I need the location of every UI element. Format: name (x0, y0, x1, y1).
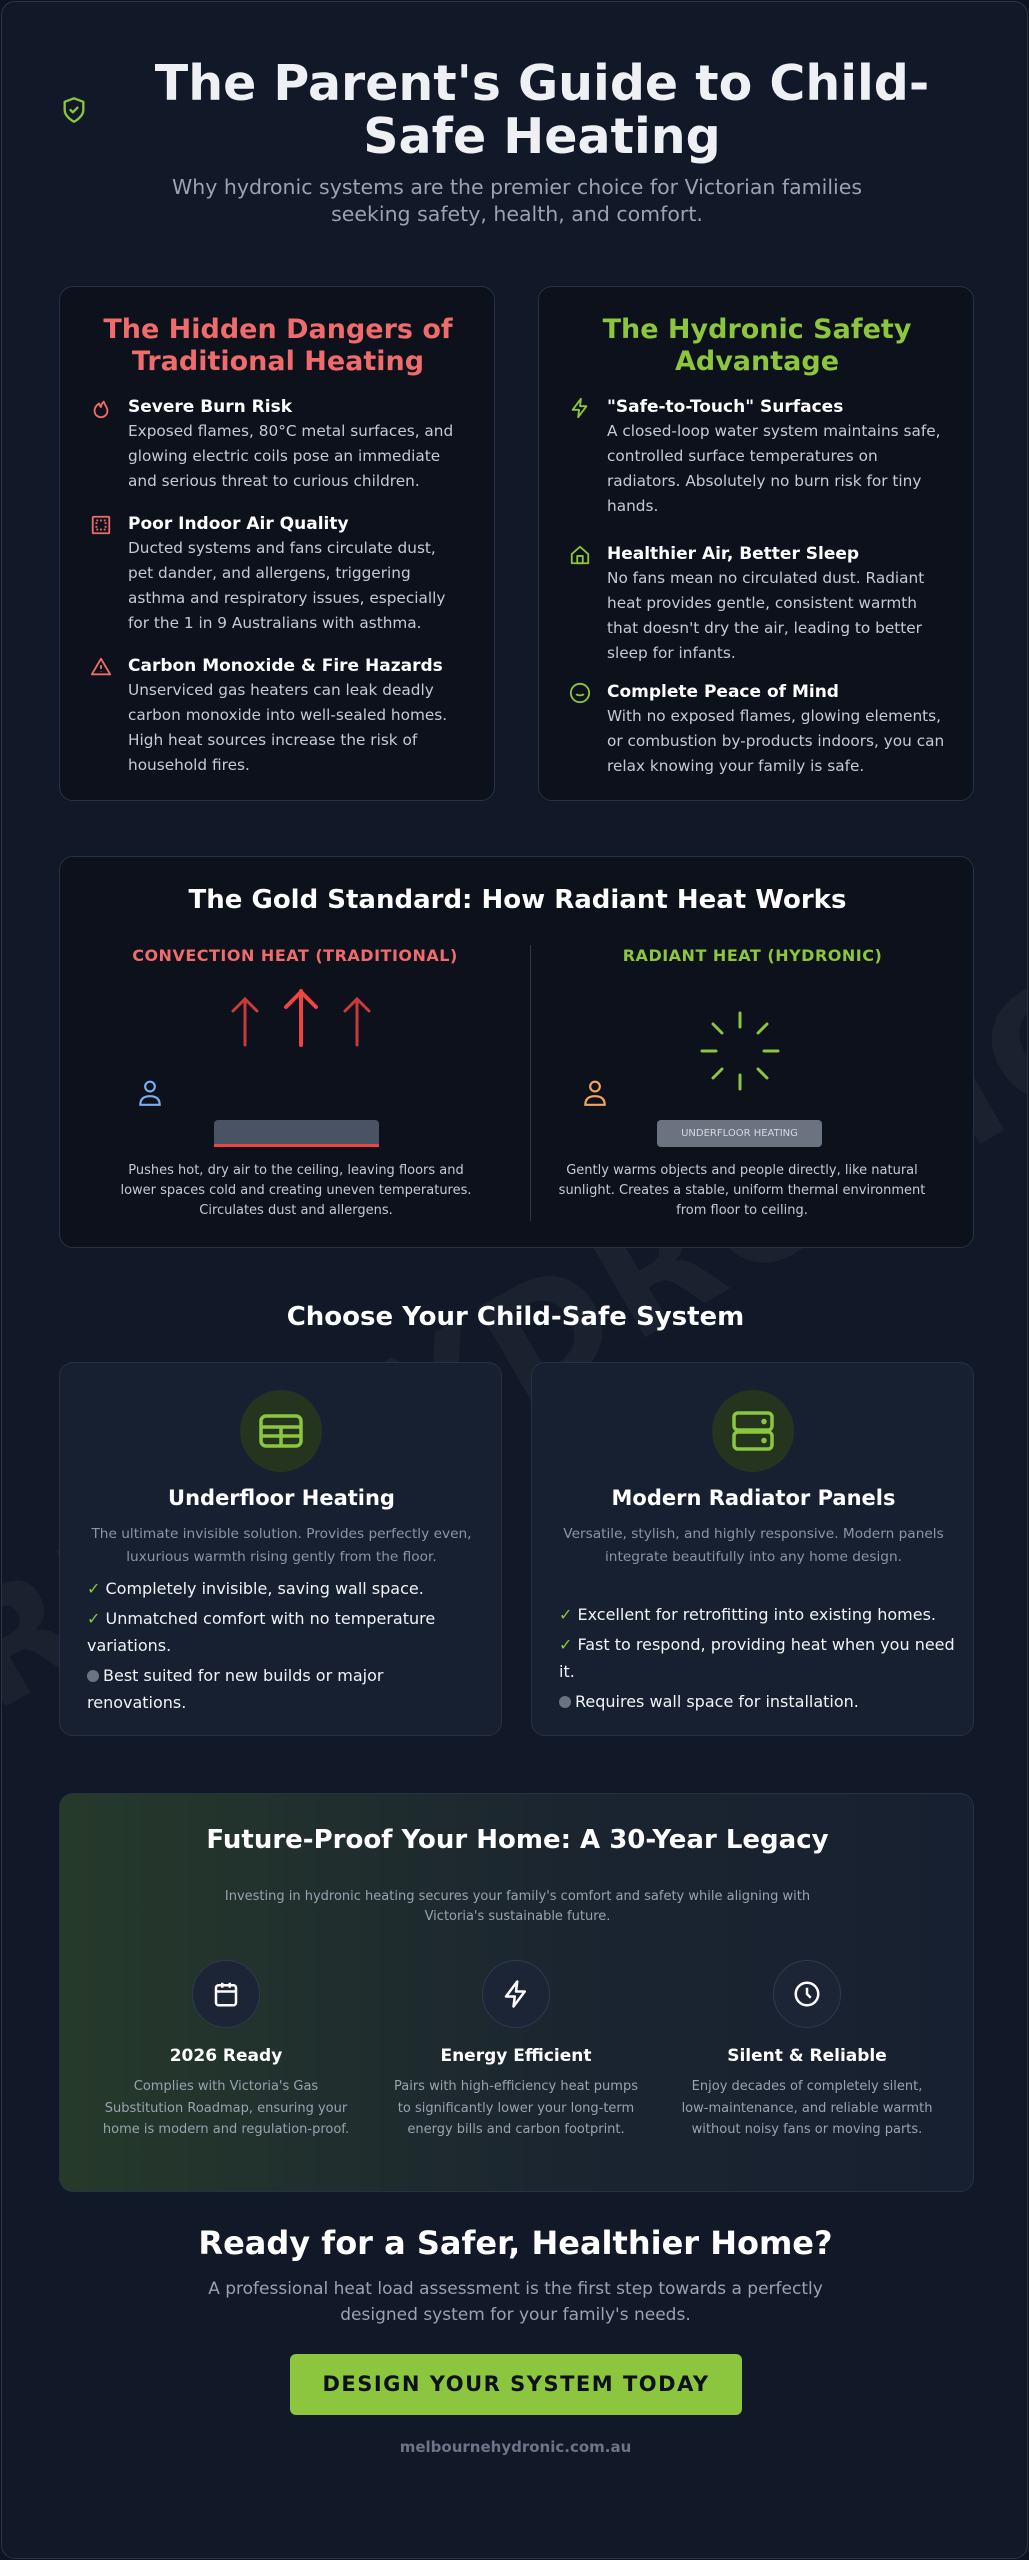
icon: smile (570, 682, 590, 704)
heading: gold standard: The Gold Standard: How Radiant Heat Works (189, 885, 846, 915)
button: cta (290, 2354, 742, 2415)
diagram: convection arrows (231, 989, 371, 1047)
diagram: radiant burst (700, 1012, 780, 1090)
title: radiators: Modern Radiator Panels (612, 1486, 895, 1510)
column: energy efficient: Energy Efficient (440, 2046, 592, 2066)
subtitle: Why hydronic systems are the premier choice for Victorian families seeking safety, health, and comfort. (172, 175, 862, 226)
column: energy efficient: Pairs with high-efficiency heat pumps to significantly lower your long-term energy bills and carbon footprint. (394, 2079, 638, 2137)
list: radiator bullets: Requires wall space for installation. (575, 1692, 859, 1711)
icon: shield (64, 97, 84, 123)
list: radiator bullets: ✓ Fast to respond, providing heat when you need it. (559, 1635, 955, 1681)
column: silent: Enjoy decades of completely silent, low-maintenance, and reliable warmth without noisy fans or moving parts. (682, 2079, 932, 2137)
icon: radiator (712, 1390, 794, 1472)
footer url: melbournehydronic.com.au (400, 2438, 631, 2456)
list: underfloor bullets: Best suited for new builds or major renovations. (87, 1666, 383, 1712)
item: burn risk (94, 397, 453, 490)
heading: dangers (103, 314, 453, 377)
item: burn risk: Exposed flames, 80°C metal surfaces, and glowing electric coils pose an immediate and serious threat to curious children. (128, 422, 453, 490)
item: air quality: Ducted systems and fans circulate dust, pet dander, and allergens, triggering asthma and respiratory issues, especially for the 1 in 9 Australians with asthma. (128, 539, 445, 632)
column: 2026 ready: 2026 Ready (170, 2046, 282, 2066)
item: safe touch: A closed-loop water system maintains safe, controlled surface temperatures on radiators. Absolutely no burn risk for tiny hands. (607, 422, 940, 515)
icon: calendar (192, 1960, 260, 2028)
panel: gold standard (59, 856, 974, 1248)
text: radiators desc: Versatile, stylish, and highly responsive. Modern panels integrate beautifully into any home design. (563, 1526, 944, 1565)
list: radiator bullets: ✓ Excellent for retrofitting into existing homes. (559, 1605, 936, 1624)
heading: advantages: Advantage (675, 346, 839, 377)
list: underfloor bullets: ✓ Completely invisible, saving wall space. (87, 1579, 424, 1598)
text: cta: A professional heat load assessment is the first step towards a perfectly designed system for your family's needs. (208, 2279, 823, 2325)
heading: dangers: The Hidden Dangers of (103, 314, 453, 345)
title: The Parent's Guide to Child- (155, 55, 929, 112)
item: peace of mind (570, 682, 944, 775)
item: safe touch: "Safe-to-Touch" Surfaces (607, 397, 843, 417)
item: air quality: Poor Indoor Air Quality (128, 514, 349, 534)
column: energy efficient (394, 1960, 638, 2137)
icon: filter (92, 516, 110, 534)
item: carbon monoxide: Carbon Monoxide & Fire Hazards (128, 656, 443, 676)
column: 2026 ready (103, 1960, 349, 2137)
diagram: convection heater (214, 1120, 379, 1147)
icon: bolt (572, 398, 588, 418)
label: radiant: RADIANT HEAT (HYDRONIC) (623, 946, 882, 965)
list: radiator bullets (559, 1605, 955, 1711)
panel: dangers (59, 286, 495, 801)
icon: bolt (482, 1960, 550, 2028)
heading: cta: Ready for a Safer, Healthier Home? (198, 2224, 833, 2262)
heading: choose system: Choose Your Child-Safe System (287, 1302, 744, 1332)
icon: clock (773, 1960, 841, 2028)
heading: dangers: Traditional Heating (132, 346, 424, 377)
label: convection: CONVECTION HEAT (TRADITIONAL) (132, 946, 458, 965)
title: Safe Heating (363, 108, 721, 165)
list: underfloor bullets: ✓ Unmatched comfort with no temperature variations. (87, 1609, 435, 1655)
icon: warning (90, 658, 112, 676)
item: healthier air: No fans mean no circulated dust. Radiant heat provides gentle, consistent warmth that doesn't dry the air, leading to better sleep for infants. (607, 569, 924, 662)
diagram: underfloor bar (657, 1120, 822, 1147)
heading: advantages: The Hydronic Safety (603, 314, 911, 345)
text: convection: Pushes hot, dry air to the ceiling, leaving floors and lower spaces cold and creating uneven temperatures. Circulates dust and allergens. (120, 1163, 472, 1218)
icon: underfloor (240, 1390, 322, 1472)
text: future intro: Investing in hydronic heating secures your family's comfort and safety while aligning with Victoria's sustainable future. (225, 1889, 810, 1924)
icon: person warm (584, 1080, 606, 1106)
list: underfloor bullets (87, 1579, 435, 1712)
panel: future-proof (59, 1793, 974, 2192)
item: burn risk: Severe Burn Risk (128, 397, 292, 417)
item: carbon monoxide: Unserviced gas heaters can leak deadly carbon monoxide into well-sealed homes. High heat sources increase the risk of household fires. (128, 681, 447, 774)
column: silent (682, 1960, 932, 2137)
item: peace of mind: With no exposed flames, glowing elements, or combustion by-products indoors, you can relax knowing your family is safe. (607, 707, 944, 775)
column: 2026 ready: Complies with Victoria's Gas Substitution Roadmap, ensuring your home is modern and regulation-proof. (103, 2079, 349, 2137)
icon: person cold (139, 1080, 161, 1106)
panel: radiators (531, 1362, 974, 1736)
text: radiant: Gently warms objects and people directly, like natural sunlight. Creates a stable, uniform thermal environment from floor to ceiling. (559, 1163, 925, 1218)
panel: underfloor (59, 1362, 502, 1736)
diagram: underfloor bar: UNDERFLOOR HEATING (681, 1128, 798, 1139)
icon: flame (94, 400, 108, 418)
column: silent: Silent & Reliable (727, 2046, 887, 2066)
text: underfloor desc: The ultimate invisible solution. Provides perfectly even, luxurious warmth rising gently from the floor. (91, 1526, 472, 1565)
button: cta: DESIGN YOUR SYSTEM TODAY (322, 2372, 710, 2396)
item: healthier air: Healthier Air, Better Sleep (607, 544, 859, 564)
heading: advantages (602, 314, 911, 377)
icon: home (570, 546, 590, 564)
item: peace of mind: Complete Peace of Mind (607, 682, 839, 702)
title: underfloor: Underfloor Heating (168, 1486, 395, 1510)
panel: advantages (538, 286, 974, 801)
heading: future-proof: Future-Proof Your Home: A 30-Year Legacy (206, 1825, 829, 1855)
title (155, 55, 929, 165)
